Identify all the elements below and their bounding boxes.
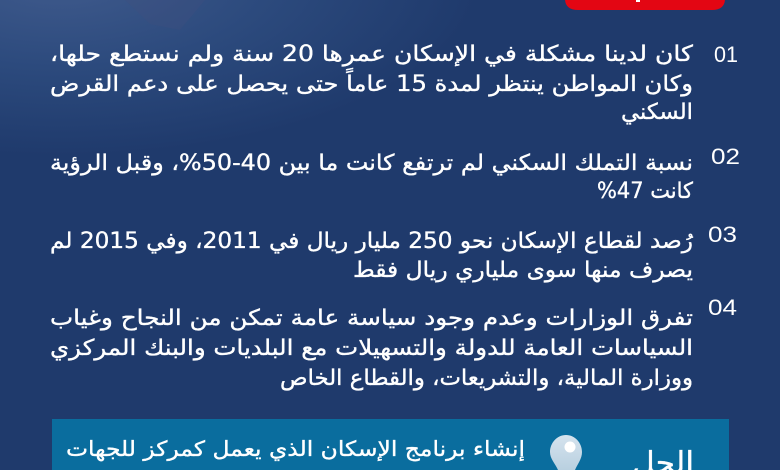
text block 02: كانت 47% (597, 179, 693, 204)
decorative figure at top (125, 0, 205, 30)
number 01: 01 (714, 42, 738, 67)
item 04 (50, 295, 737, 391)
panel: solution (52, 419, 729, 470)
red title tab (565, 0, 725, 10)
solution text: إنشاء برنامج الإسكان الذي يعمل كمركز للجهات (66, 437, 525, 462)
item 02 (50, 144, 740, 204)
icon: light bulb (550, 435, 582, 470)
text block 01: كان لدينا مشكلة في الإسكان عمرها 20 سنة ولم نستطع حلها، (50, 42, 694, 67)
text block 01: السكني (621, 100, 693, 125)
number 03: 03 (708, 222, 737, 247)
text block 03: يصرف منها سوى ملياري ريال فقط (353, 258, 693, 283)
text block 02 (50, 151, 693, 204)
text block 01 (50, 42, 694, 125)
item 01 (50, 42, 738, 125)
text block 03: رُصد لقطاع الإسكان نحو 250 مليار ريال في 2011، وفي 2015 لم (50, 229, 693, 254)
text block 04: ووزارة المالية، والتشريعات، والقطاع الخاص (280, 366, 693, 391)
text block 03 (50, 229, 693, 283)
text block 04: السياسات العامة للدولة والتسهيلات مع البلديات والبنك المركزي (50, 336, 693, 361)
item 03 (50, 222, 737, 283)
text block 01: وكان المواطن ينتظر لمدة 15 عاماً حتى يحصل على دعم القرض (50, 67, 693, 97)
number 04: 04 (708, 295, 737, 320)
text block 04 (50, 306, 693, 391)
number 02: 02 (711, 144, 740, 169)
text block 04: تفرق الوزارات وعدم وجود سياسة عامة تمكن من النجاح وغياب (50, 306, 693, 331)
text block 02: نسبة التملك السكني لم ترتفع كانت ما بين 40-50%، وقبل الرؤية (50, 151, 693, 176)
